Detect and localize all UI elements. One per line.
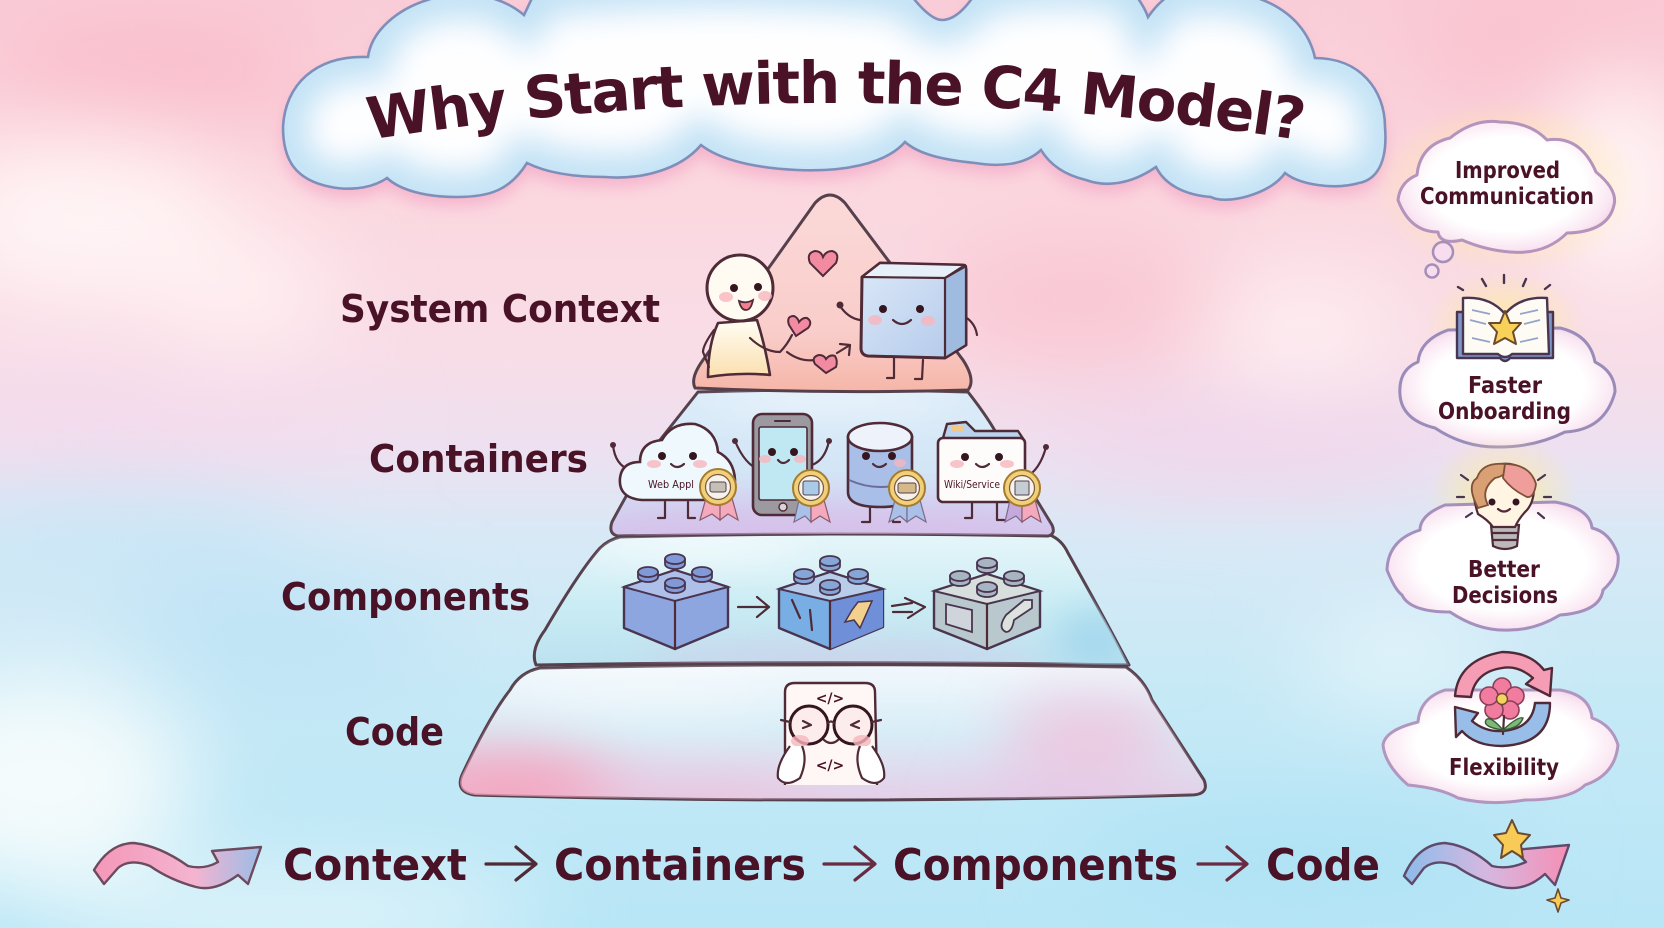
pyramid (400, 195, 1205, 826)
icon: person (703, 255, 773, 377)
badge: web app (700, 469, 738, 520)
icon: grey lego brick (934, 558, 1040, 649)
label: Containers: Containers (369, 437, 588, 481)
flow word: Code: Code (1266, 840, 1380, 891)
icon: code character with glasses: </> (816, 691, 844, 707)
label: Components: Components (281, 575, 530, 619)
icon: left swoosh arrow (94, 843, 261, 888)
icon: hearts and relationship arrow (750, 251, 850, 373)
benefit cloud: better decisions (1387, 435, 1618, 630)
tier 4: code (458, 664, 1207, 802)
icon: web service folder container: Wiki/Service (944, 478, 1000, 491)
benefit cloud: better decisions: Better (1468, 557, 1541, 583)
icon: database container (848, 423, 926, 522)
icon: code character with glasses (778, 683, 884, 785)
arrow (1198, 847, 1247, 880)
icon: code character with glasses: </> (816, 758, 844, 774)
icon: gold star (1494, 820, 1530, 858)
title: Why Start with the C4 Model? (366, 59, 1304, 138)
flow word: Components: Components (893, 840, 1178, 891)
benefit cloud: faster onboarding (1400, 269, 1615, 447)
icon: blue lego brick (624, 554, 728, 649)
icon: small sparkle (1547, 889, 1569, 912)
arrow (892, 598, 925, 618)
icon: lightbulb with brain (1457, 464, 1551, 549)
benefit cloud: improved communication (1372, 99, 1642, 278)
benefit cloud: flexibility: Flexibility (1449, 755, 1559, 781)
icon: system cube (836, 263, 977, 379)
benefit cloud: faster onboarding: Onboarding (1438, 399, 1571, 425)
benefit cloud: better decisions: Decisions (1452, 583, 1558, 609)
bottom flow (94, 820, 1569, 912)
arrow (486, 847, 536, 880)
icon: phone container (732, 414, 832, 522)
tier 3: components (534, 534, 1135, 670)
benefit cloud: improved communication: Improved (1455, 158, 1560, 184)
badge: service (1004, 470, 1041, 522)
benefit cloud: faster onboarding: Faster (1468, 373, 1543, 399)
icon: patterned lego brick (779, 556, 883, 649)
benefit cloud: improved communication: Communication (1420, 184, 1594, 210)
icon: cloud container (610, 424, 738, 520)
arrow (738, 597, 769, 617)
tier 1: system context (694, 195, 977, 392)
icon: cloud container: Web Appl (648, 478, 694, 491)
flow word: Context: Context (283, 840, 467, 891)
badge: database (889, 470, 926, 522)
flow word: Containers: Containers (554, 840, 806, 891)
benefit cloud: flexibility (1383, 652, 1618, 803)
label: Code: Code (345, 710, 444, 754)
icon: flexibility cycle with flower (1455, 652, 1552, 746)
icon: open book with star (1457, 275, 1553, 361)
title cloud (278, 0, 1390, 214)
badge: phone (793, 470, 830, 522)
tier 2: containers (610, 390, 1053, 544)
label: System Context: System Context (340, 287, 660, 331)
arrow (824, 847, 875, 880)
icon: right swoosh arrow (1404, 843, 1569, 888)
icon: web service folder container (938, 422, 1049, 522)
thought bubble (1426, 242, 1453, 278)
